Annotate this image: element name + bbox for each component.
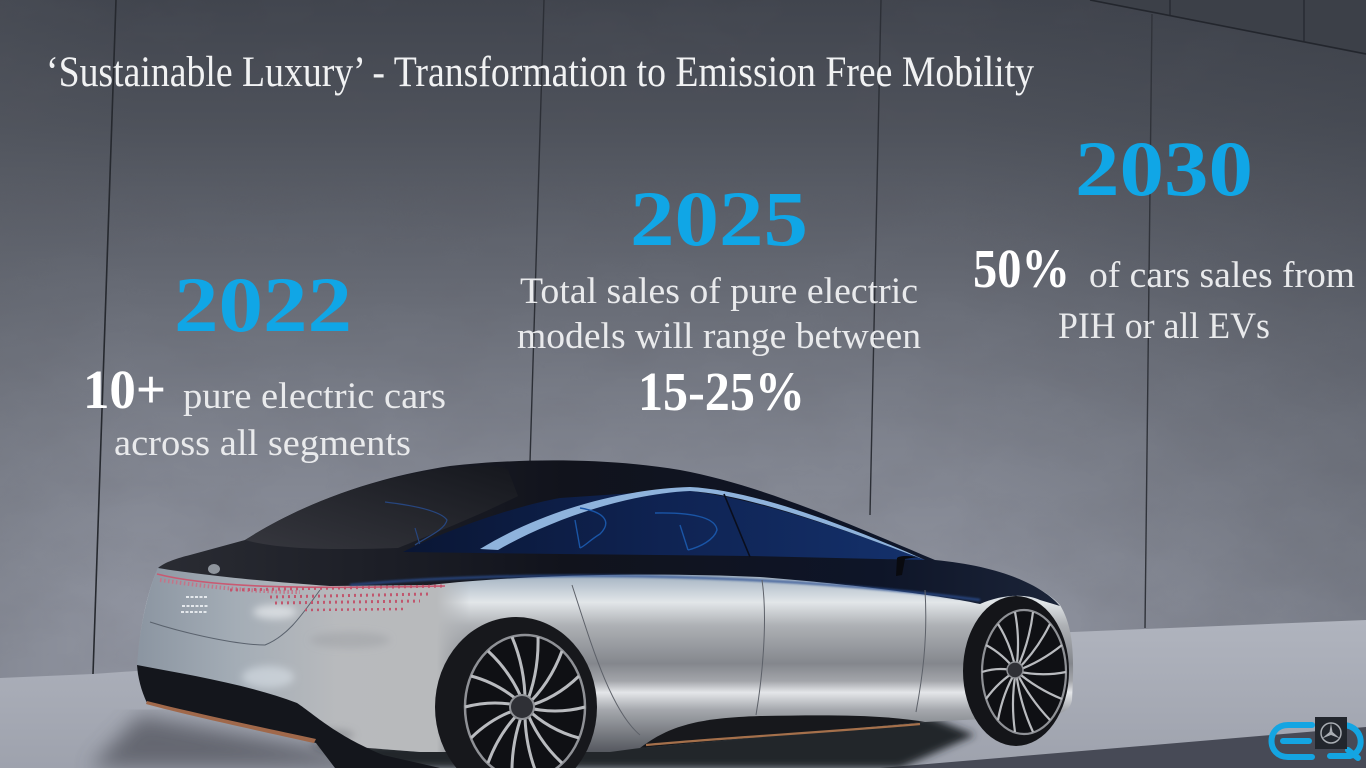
milestone 2025: [517, 175, 921, 422]
trunk panel seam: [150, 590, 320, 645]
text: 50% of cars sales from PIH or all EVs: of cars sales from: [1089, 255, 1355, 296]
chrome window trim: [480, 487, 925, 560]
text: 50% of cars sales from PIH or all EVs: 50%: [973, 238, 1070, 299]
text: total sales of pure electric models: [517, 271, 921, 357]
rear wheel: [435, 617, 597, 768]
rear star emblem: [208, 564, 220, 574]
wing mirror: [896, 556, 918, 576]
car body: silver shell: [137, 560, 1073, 752]
rear diffuser: [137, 665, 440, 768]
car illustration: [137, 460, 1073, 768]
dark roof and shoulder: [158, 460, 1060, 606]
text: 10+ pure electric cars across all segments: pure electric cars: [183, 376, 446, 417]
text: total sales of pure electric models: models will range between: [517, 316, 921, 357]
milestone 2030: [973, 125, 1355, 347]
door seams: [572, 580, 926, 735]
year 2030: 2030: [1075, 125, 1253, 212]
rear silver tone: [137, 568, 470, 752]
year 2022: 2022: [174, 261, 352, 348]
side windows: [403, 490, 925, 560]
front wheel: [963, 596, 1069, 746]
rear glass blue reflections: [385, 502, 447, 545]
red dotted tail light: [157, 574, 445, 610]
milestone 2022: [83, 261, 446, 464]
side sill: [640, 715, 925, 748]
text: 50% of cars sales from PIH or all EVs: PIH or all EVs: [1058, 306, 1270, 347]
EQ logo: [1272, 725, 1361, 758]
text: total sales of pure electric models: Total sales of pure electric: [520, 271, 918, 312]
body highlights: [242, 605, 390, 741]
text: 50% of cars sales from PIH or all EVs: [973, 238, 1355, 347]
text: 10+ pure electric cars across all segments: [83, 359, 446, 464]
rear glass roof: [245, 466, 518, 549]
shoulder blue line: [350, 576, 980, 600]
seat outlines: [575, 508, 717, 550]
title: ‘Sustainable Luxury’ - Transformation to Emission Free Mobility: [46, 49, 1034, 96]
window pillar: [724, 494, 750, 557]
value 15-25%: 15-25%: [638, 361, 805, 422]
Mercedes star badge: [1315, 717, 1347, 749]
text: 10+ pure electric cars across all segments: across all segments: [114, 423, 411, 464]
ground pavement: [0, 620, 1366, 768]
year 2025: 2025: [630, 175, 808, 262]
text: 10+ pure electric cars across all segments: 10+: [83, 359, 166, 420]
rear badge marks: [181, 597, 208, 612]
copper sill trim: [646, 724, 920, 745]
copper trim rear: [146, 701, 316, 743]
